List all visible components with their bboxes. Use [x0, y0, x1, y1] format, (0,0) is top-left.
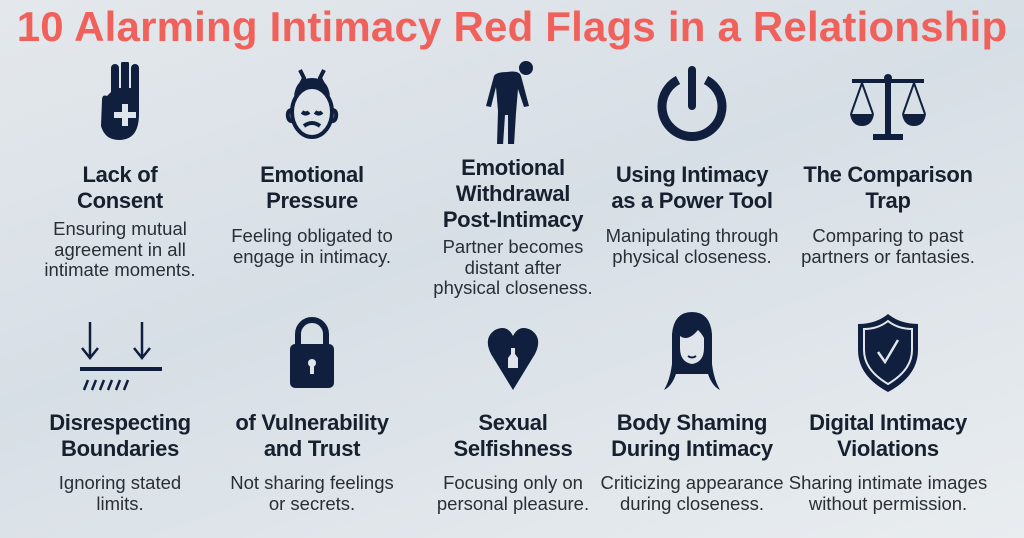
description: during closeness. [620, 492, 764, 514]
heading [260, 162, 364, 213]
heading [443, 155, 584, 232]
heading: Body Shaming [617, 410, 767, 435]
heading: Disrespecting [49, 410, 191, 435]
panel: digital intimacy violations [789, 314, 987, 514]
heading [49, 410, 191, 461]
description [231, 225, 393, 267]
icon: stressed face [286, 69, 338, 139]
panel: emotional pressure [231, 69, 393, 267]
heading: Pressure [266, 188, 358, 213]
description: engage in intimacy. [233, 246, 391, 266]
icon: shield check [858, 314, 918, 392]
description: Sharing intimate images [789, 472, 987, 493]
description [44, 218, 196, 280]
description [59, 472, 181, 514]
description [789, 472, 987, 514]
description: Partner becomes [443, 236, 583, 257]
heading: Withdrawal [456, 181, 570, 206]
panel: lack of consent [44, 62, 196, 280]
icon: scales [850, 74, 926, 140]
heading [235, 410, 389, 461]
description: Ensuring mutual [53, 218, 187, 239]
heading: Post-Intimacy [443, 207, 583, 232]
description: Manipulating through [606, 225, 778, 246]
heading: Sexual [478, 410, 548, 435]
title: 10 Alarming Intimacy Red Flags in a Relationship [17, 3, 1007, 50]
icon: woman [664, 312, 720, 390]
description: Feeling obligated to [231, 225, 393, 246]
description: partners or fantasies. [801, 246, 975, 266]
panel: disrespecting boundaries [49, 322, 191, 514]
icon: power button [658, 66, 726, 141]
description: Focusing only on [443, 472, 583, 493]
heading [454, 410, 572, 461]
description: limits. [96, 492, 144, 514]
heading: Digital Intimacy [809, 410, 967, 435]
heading [611, 162, 773, 213]
icon: heart [488, 328, 538, 390]
heading [809, 410, 968, 461]
description [437, 472, 589, 514]
icon: arrows to boundary [80, 322, 162, 390]
panel: body shaming [600, 312, 784, 514]
heading: Selfishness [454, 436, 572, 461]
heading: Trap [865, 188, 911, 213]
description [801, 225, 975, 267]
heading [803, 162, 973, 213]
heading: of Vulnerability [235, 410, 389, 435]
heading: The Comparison [803, 162, 973, 187]
description: Not sharing feelings [230, 472, 394, 493]
description [230, 472, 394, 514]
heading: as a Power Tool [611, 188, 773, 213]
description: without permission. [809, 492, 967, 514]
description [433, 236, 593, 298]
description: personal pleasure. [437, 492, 589, 514]
description: physical closeness. [433, 277, 593, 298]
heading: Consent [77, 188, 163, 213]
icon: hand with cross [101, 62, 139, 140]
panel: power tool [606, 66, 778, 267]
description: intimate moments. [44, 259, 196, 280]
panel: comparison trap [801, 74, 975, 267]
description: Comparing to past [812, 225, 964, 246]
panel: sexual selfishness [437, 328, 589, 514]
heading: Lack of [83, 162, 157, 187]
heading: Emotional [461, 155, 565, 180]
heading: During Intimacy [611, 436, 773, 461]
heading: Boundaries [61, 436, 179, 461]
heading: Violations [837, 436, 939, 461]
heading: Using Intimacy [616, 162, 768, 187]
panel: emotional withdrawal [433, 61, 593, 298]
heading [611, 410, 773, 461]
description: distant after [465, 256, 561, 278]
icon: padlock [290, 317, 334, 388]
description: Ignoring stated [59, 472, 181, 493]
heading: Emotional [260, 162, 364, 187]
description: agreement in all [54, 238, 186, 260]
heading: and Trust [264, 436, 360, 461]
description: Criticizing appearance [600, 472, 784, 493]
description [600, 472, 784, 514]
description: or secrets. [269, 492, 355, 514]
heading [77, 162, 163, 213]
description: physical closeness. [612, 246, 772, 266]
description [606, 225, 778, 267]
icon: slouched person [486, 61, 533, 144]
panel: vulnerability and trust [230, 317, 394, 514]
